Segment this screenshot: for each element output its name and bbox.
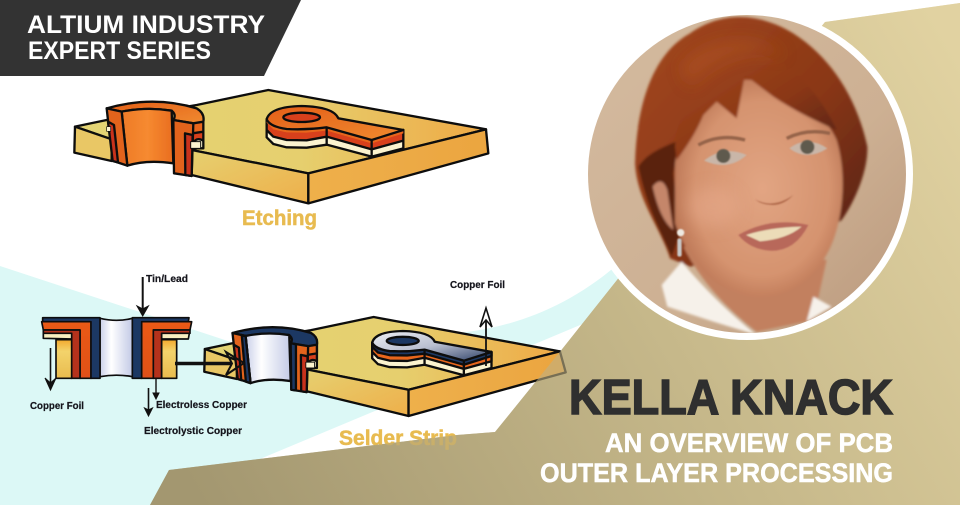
brows	[698, 132, 830, 145]
left cut face	[232, 333, 251, 383]
teeth	[746, 227, 802, 241]
right cut face	[291, 343, 308, 392]
banner: series title: ALTIUM INDUSTRY	[27, 11, 265, 39]
right copper stack	[142, 322, 192, 378]
neck and chest	[683, 247, 827, 332]
hair highlight	[688, 42, 756, 76]
arrow: connector to board	[175, 352, 244, 375]
arrow: right Copper Foil	[480, 308, 492, 366]
silver pad with trace	[372, 343, 491, 375]
ear	[653, 182, 673, 230]
nose shadow	[755, 195, 793, 205]
subtitle: AN OVERVIEW OF PCB	[605, 428, 893, 458]
label: Electroless Copper: Electroless Copper	[156, 400, 247, 411]
portrait photo	[580, 10, 913, 343]
hair back	[635, 17, 867, 267]
left copper stack	[42, 322, 91, 378]
plated barrel top ring	[107, 102, 204, 123]
dark left hair shadow	[638, 140, 680, 257]
arrow: Electrolystic Copper	[144, 388, 152, 416]
white hole	[100, 318, 132, 377]
subtitle: OUTER LAYER PROCESSING	[540, 458, 893, 488]
right cut face	[173, 120, 193, 176]
subtitle	[540, 428, 893, 488]
left cut face	[107, 108, 127, 166]
diagram: etching board	[74, 90, 488, 203]
outer layers of plated barrel	[193, 120, 203, 148]
name: Kella Knack: KELLA KNACK	[569, 371, 893, 425]
eye left	[704, 151, 747, 165]
circular pad with trace	[267, 119, 403, 157]
fringe	[673, 78, 836, 160]
arrow: left Copper Foil	[45, 348, 56, 390]
label: Tin/Lead: Tin/Lead	[146, 274, 188, 285]
eye right	[789, 142, 827, 155]
arrows	[45, 277, 492, 416]
arrow: Electroless Copper	[153, 378, 159, 399]
label: Selder Strip: Selder Strip	[339, 427, 457, 450]
earring	[677, 229, 684, 236]
collar left	[662, 262, 757, 335]
arrow: Tin/Lead	[137, 277, 148, 316]
teal background shape	[0, 265, 640, 505]
banner: series title: EXPERT SERIES	[28, 37, 211, 65]
portrait ring	[581, 8, 913, 340]
face	[675, 80, 843, 297]
label: Copper Foil left: Copper Foil	[30, 401, 84, 412]
banner: series title	[0, 0, 301, 76]
label: Electrolystic Copper: Electrolystic Copper	[144, 426, 242, 437]
cheek glow	[690, 192, 730, 223]
hole wall	[122, 109, 173, 166]
navy barrel top ring	[232, 327, 317, 346]
collar right	[807, 297, 832, 322]
label: Copper Foil right: Copper Foil	[450, 280, 505, 291]
diagram: solder strip board	[204, 317, 566, 416]
mouth	[738, 222, 808, 251]
label: Etching: Etching	[242, 207, 317, 230]
diagram: plated through-hole cross-section	[42, 318, 192, 378]
white hole wall	[246, 334, 291, 383]
